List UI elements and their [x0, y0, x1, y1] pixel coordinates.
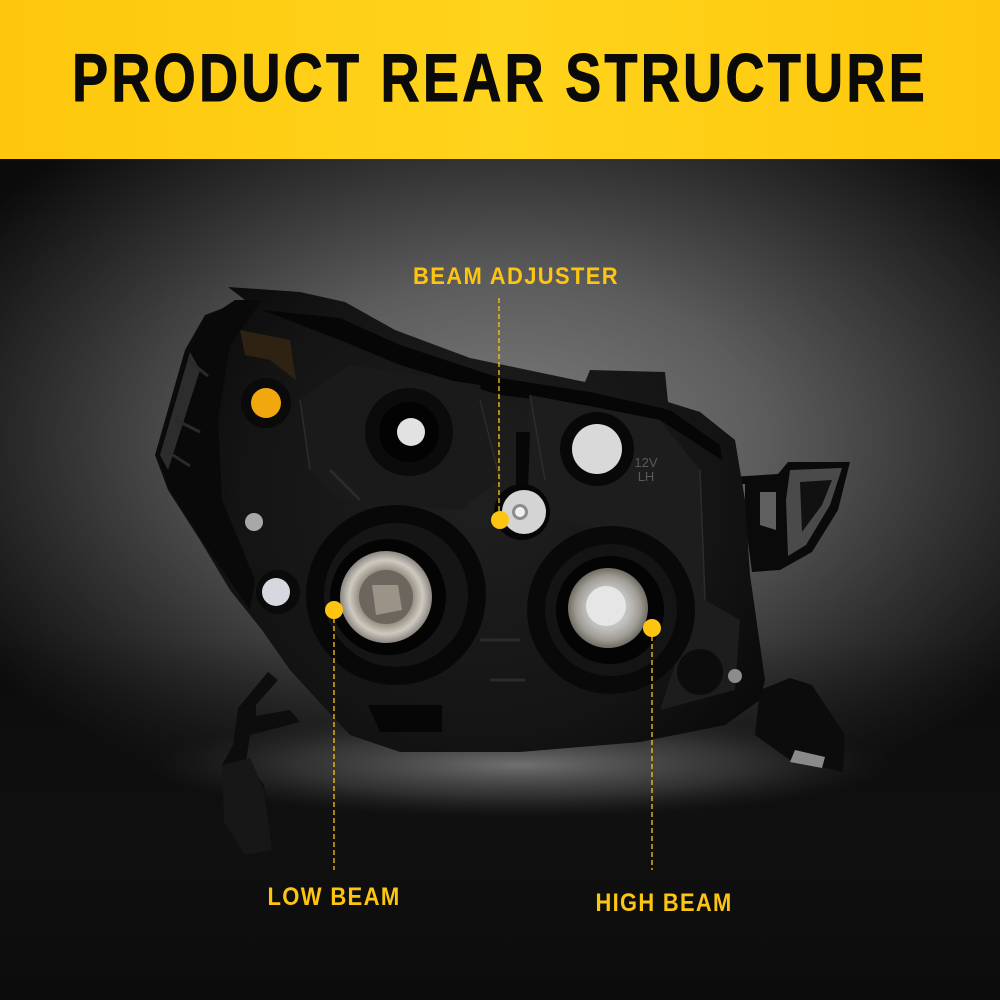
callout: high beam — [596, 619, 732, 917]
headlight assembly: LH — [638, 469, 654, 484]
beam adjuster socket — [494, 484, 550, 540]
housing ridge left — [158, 300, 262, 610]
upper right socket — [560, 412, 634, 486]
low beam socket — [306, 505, 486, 685]
adjuster stem — [516, 432, 530, 490]
upper small socket — [365, 388, 453, 476]
left edge light strip — [160, 352, 200, 470]
12V label: 12V — [634, 455, 658, 470]
inner highlight panels — [300, 365, 500, 510]
amber bulb socket — [241, 378, 291, 428]
right bracket — [715, 462, 850, 572]
label: LOW BEAM — [268, 883, 400, 911]
screw — [245, 513, 263, 531]
lower left bracket — [222, 672, 300, 855]
upper ridge — [262, 310, 722, 460]
floor shadow — [0, 640, 1000, 1000]
floor glow — [150, 713, 890, 817]
callout: beam adjuster — [413, 263, 619, 529]
headlight assembly — [155, 287, 850, 855]
header banner — [0, 0, 1000, 159]
bottom tabs — [368, 705, 442, 732]
callout: low beam — [268, 601, 400, 911]
ribs — [168, 360, 525, 680]
main housing — [155, 287, 765, 752]
high beam socket — [527, 526, 695, 694]
label: BEAM ADJUSTER — [413, 263, 619, 290]
lower right bracket — [755, 678, 845, 772]
small plug — [256, 570, 300, 614]
label: HIGH BEAM — [596, 889, 732, 917]
